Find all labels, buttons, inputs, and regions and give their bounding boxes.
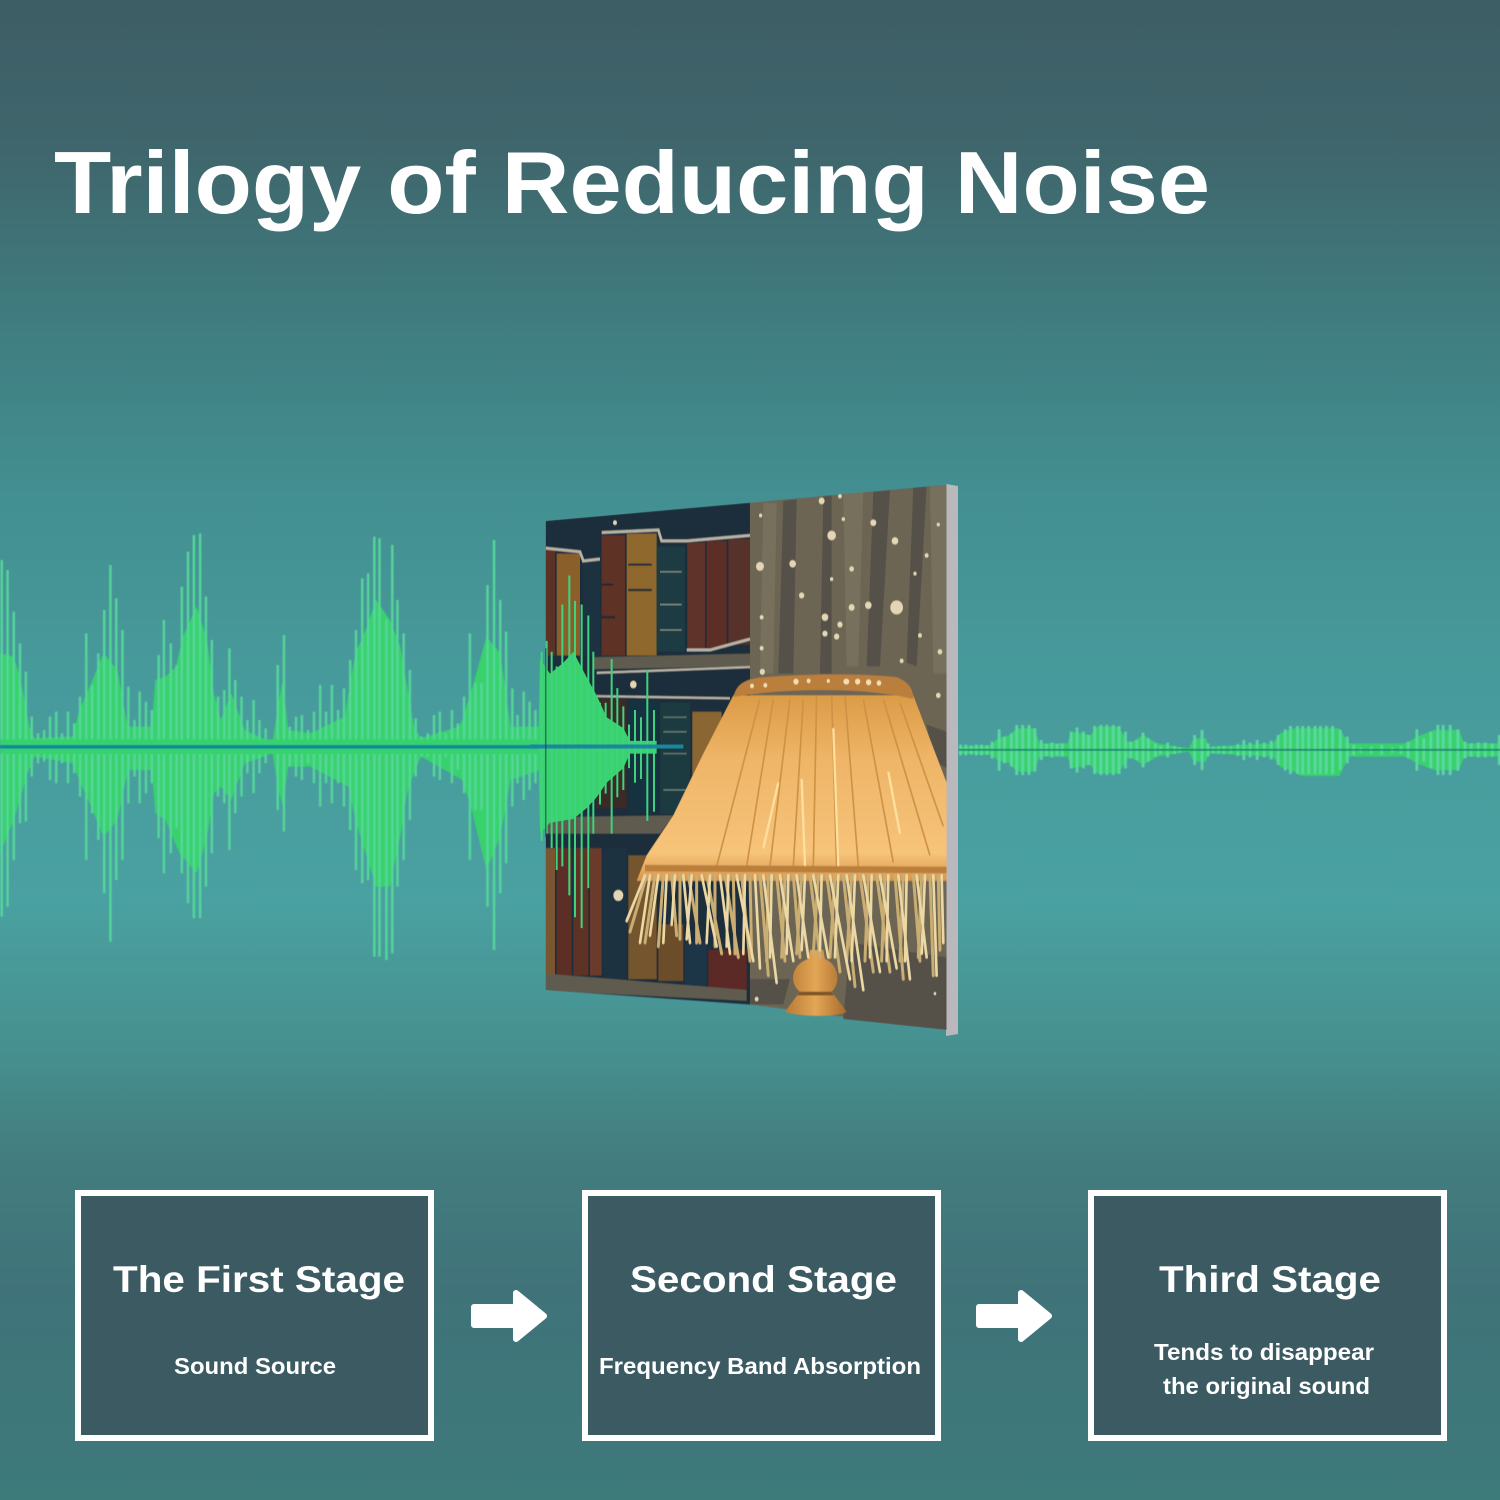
waveform: reduced sound [959,725,1500,776]
waveform: sound entering panel [530,575,683,928]
stage box: first stage [78,1193,431,1438]
title: Trilogy of Reducing Noise [54,133,1210,232]
panel edge: acoustic panel side [946,484,958,1036]
shelf 2 [546,815,673,834]
heading: second stage: Second Stage [630,1259,897,1300]
heading: the first stage: The First Stage [113,1259,405,1300]
acoustic panel: bookshelf and lamp artwork [530,485,947,1030]
caption: the original sound: the original sound [1163,1373,1370,1399]
shelf 3 [546,974,747,1001]
lamp fringe [627,875,943,990]
waveform: original sound [0,533,541,960]
heading: third stage: Third Stage [1159,1259,1381,1300]
arrow: second to third stage [979,1293,1049,1339]
stage box: third stage [1091,1193,1444,1438]
snow dots [613,494,942,1001]
books: middle row [597,667,750,814]
bookshelf background [546,503,750,1004]
stage box: second stage [585,1193,938,1438]
caption: frequency band absorption: Frequency Band Absorption [599,1353,921,1379]
arrow: first to second stage [474,1293,544,1339]
lamp base [785,950,847,1016]
books: bottom row [546,848,747,990]
caption: tends to disappear: Tends to disappear [1154,1339,1374,1365]
curtain [750,485,947,1030]
books: top row [546,530,750,655]
caption: sound source: Sound Source [174,1353,336,1379]
shelf 1 [593,654,750,669]
lamp shade [637,675,947,881]
